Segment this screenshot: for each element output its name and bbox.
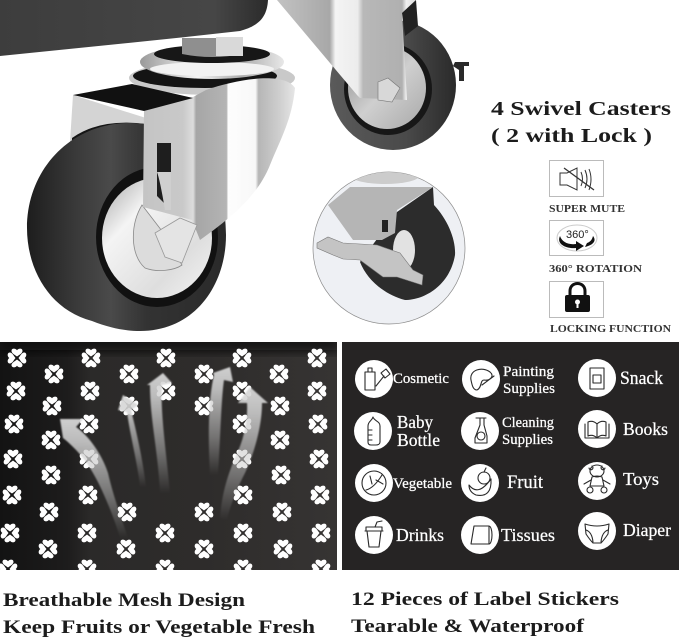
sticker: vegetable (355, 464, 452, 502)
bracket slot (157, 143, 171, 210)
feature: locking function: LOCKING FUNCTION (550, 324, 672, 335)
heading: 4 swivel casters: ( 2 with Lock ) (491, 125, 652, 147)
sticker: books: Books (623, 419, 668, 439)
sticker: baby bottle (354, 412, 440, 450)
caption: label stickers: Tearable & Waterproof (351, 616, 585, 637)
sticker: cosmetic (355, 360, 449, 398)
sticker: snack (578, 359, 663, 397)
bracket body (143, 78, 295, 240)
sticker: painting supplies (462, 360, 555, 398)
sticker: tissues: Tissues (501, 525, 555, 545)
sticker: baby bottle: Bottle (397, 430, 440, 450)
sticker: diaper (578, 512, 671, 550)
caption: breathable mesh: Keep Fruits or Vegetable Fresh (3, 617, 316, 638)
inset top disc (356, 172, 418, 184)
icon: muted speaker (560, 168, 594, 190)
caption: breathable mesh (3, 590, 316, 638)
axle nut (155, 218, 197, 263)
rear bracket leg (70, 95, 146, 150)
sticker: cleaning supplies: Supplies (502, 432, 553, 448)
second caster lock pedal (453, 62, 469, 81)
black storage bin bottom (0, 0, 268, 56)
sticker: books (578, 410, 668, 448)
sticker: diaper: Diaper (623, 520, 671, 540)
sticker: baby bottle: Baby (397, 412, 433, 432)
second caster bracket (277, 0, 416, 100)
arrow: centre-right airflow (209, 367, 233, 475)
sticker: cosmetic: Cosmetic (393, 371, 449, 387)
inset rim (393, 230, 415, 270)
sticker: fruit (461, 464, 544, 502)
panel: breathable mesh (0, 336, 340, 578)
caster stem and washers (129, 37, 295, 95)
bracket top plate (73, 84, 193, 111)
inset lock lever (317, 237, 423, 285)
second caster (277, 0, 469, 150)
sticker: toys (578, 462, 659, 500)
sticker: vegetable: Vegetable (393, 476, 452, 492)
panel: label stickers (342, 342, 679, 570)
feature: 360 rotation: 360° ROTATION (549, 264, 643, 275)
sticker: cleaning supplies (461, 412, 554, 450)
arrow: left airflow (60, 419, 128, 538)
feature: super mute: SUPER MUTE (549, 204, 625, 215)
inset bracket (328, 187, 433, 240)
second caster rim (344, 43, 432, 135)
inset: caster lock detail (313, 168, 465, 324)
arrow: centre-left airflow (118, 395, 146, 487)
heading: 4 swivel casters: 4 Swivel Casters (491, 98, 671, 120)
arrow: centre airflow (147, 373, 172, 493)
sticker: drinks (355, 516, 444, 554)
mesh hole pattern (0, 349, 330, 578)
sticker: tissues (461, 516, 555, 554)
sticker: painting supplies: Supplies (503, 381, 555, 397)
feature: 360 rotation (549, 220, 643, 275)
inset tyre (360, 187, 455, 300)
arrow: right airflow (220, 387, 268, 520)
main swivel caster (27, 37, 295, 331)
wheel silver rim (102, 178, 212, 298)
feature: locking function (550, 282, 672, 335)
feature: super mute (549, 160, 625, 215)
sticker: cleaning supplies: Cleaning (502, 415, 554, 431)
sticker: painting supplies: Painting (503, 364, 554, 380)
icon: rotation arrow: 360° (566, 229, 589, 241)
second caster tyre (330, 20, 456, 150)
icon: padlock (565, 284, 590, 312)
caption: label stickers: 12 Pieces of Label Stickers (351, 589, 619, 610)
second caster axle nut (378, 78, 400, 102)
rubber wheel (27, 123, 226, 331)
caption: label stickers (351, 589, 619, 637)
heading: 4 swivel casters (491, 98, 671, 147)
wheel dark ring (96, 167, 218, 307)
sticker: drinks: Drinks (396, 525, 444, 545)
sticker: snack: Snack (620, 368, 663, 389)
sticker: toys: Toys (623, 469, 659, 489)
caption: breathable mesh: Breathable Mesh Design (3, 590, 246, 611)
sticker: fruit: Fruit (507, 472, 544, 493)
